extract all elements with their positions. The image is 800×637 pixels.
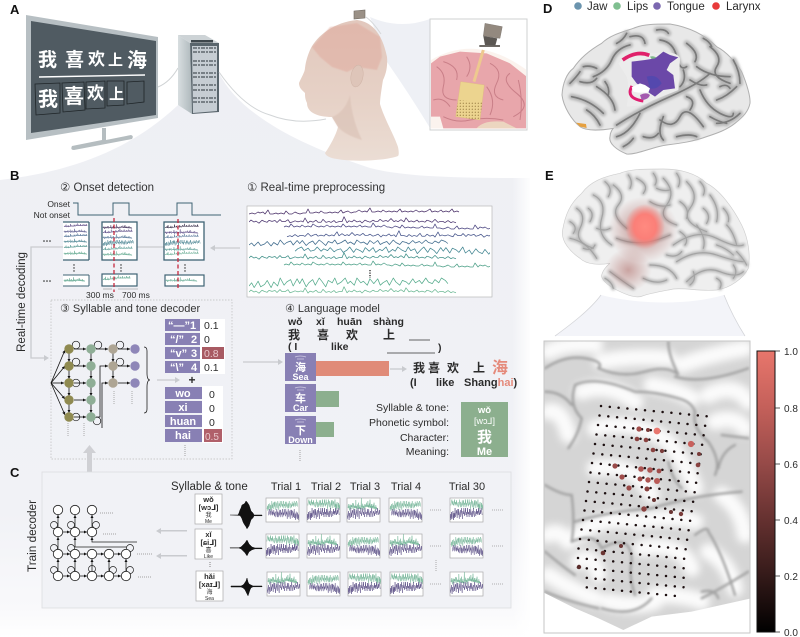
label C: C <box>10 465 20 480</box>
syllable probability table: 0.5 <box>205 432 219 443</box>
waveform: hai <box>231 578 262 596</box>
decoded characters <box>38 79 124 112</box>
card: hai <box>196 571 223 602</box>
syllable probability table <box>165 386 223 457</box>
trial headers: Trial 4 <box>391 481 421 493</box>
waveform: wo <box>230 501 262 529</box>
vertical label: train decoder: Train decoder <box>27 500 39 572</box>
target sentence: 喜 <box>65 45 84 72</box>
syllable probability table: 0 <box>209 417 215 429</box>
vertical label: real-time decoding: Real-time decoding <box>16 252 28 352</box>
arrow to tables <box>157 377 180 383</box>
label E: E <box>545 168 554 183</box>
legend card: Me <box>477 446 492 458</box>
context sentence: ( I <box>288 341 297 353</box>
arrow into decoder <box>44 355 49 361</box>
candidate: car <box>285 384 339 413</box>
array tail <box>474 50 483 82</box>
tick labels: 0.2 <box>784 572 798 583</box>
onset signal: Onset <box>47 199 71 209</box>
plus sign: + <box>188 373 196 387</box>
candidate: sea <box>285 353 389 382</box>
arrow train to decoder <box>83 445 96 482</box>
tone probability table: 0 <box>204 334 210 346</box>
decoded characters: 欢 <box>87 79 104 104</box>
panel: train decoder <box>27 472 511 608</box>
trial headers <box>271 481 485 493</box>
legend card: wǒ <box>477 405 491 416</box>
ear <box>349 64 365 88</box>
candidate: sea: 海 <box>295 359 306 375</box>
panel: language model <box>285 303 518 462</box>
onset signal <box>34 199 221 220</box>
window 2 <box>102 222 137 260</box>
training network <box>50 505 152 581</box>
window 1 <box>63 222 89 260</box>
preprocessed neural traces <box>247 206 494 297</box>
trial headers: Trial 1 <box>271 481 301 493</box>
panel: syllable and tone decoder <box>51 300 232 459</box>
context sentence: ) <box>438 342 442 354</box>
decoded characters: 上 <box>109 83 124 104</box>
window timing <box>86 289 150 300</box>
grey flow line to decoder <box>31 247 165 358</box>
sulci <box>570 173 747 288</box>
funnel edges <box>555 295 745 336</box>
gyral shading <box>570 30 740 147</box>
output brace <box>144 347 150 413</box>
tone probability table: 0.8 <box>204 348 219 360</box>
colorbar <box>757 347 798 637</box>
context sentence: 我 <box>288 326 300 343</box>
output sentence: (I <box>410 377 417 389</box>
candidate: sea: Sea <box>292 372 310 382</box>
target sentence: 欢 <box>88 45 105 70</box>
tick marks <box>775 351 780 632</box>
label A: A <box>10 2 20 17</box>
brain activation map <box>562 169 749 297</box>
legend card: 我 <box>477 426 492 447</box>
electrode pedestal <box>354 10 365 19</box>
output sentence <box>410 354 518 389</box>
sliding onset windows <box>43 218 204 300</box>
syllable probability table: xi <box>178 402 188 414</box>
card ellipsis <box>209 562 211 568</box>
activation core <box>625 204 665 249</box>
tone probability table: “v” <box>170 348 187 360</box>
card: hai: hǎi <box>204 572 215 581</box>
window timing: 700 ms <box>122 290 150 300</box>
electrode grid <box>577 405 717 599</box>
legend card <box>461 402 508 458</box>
candidate: down <box>285 416 334 445</box>
orange spot <box>576 123 587 128</box>
brain seen through skull <box>312 23 382 72</box>
tone probability table: 0.1 <box>204 320 219 332</box>
waveform: xi <box>230 540 262 556</box>
tick labels: 0.6 <box>784 460 798 471</box>
card: wo: 我 <box>205 510 212 519</box>
legend: articulators: Tongue <box>667 1 705 13</box>
candidate ellipsis <box>299 450 301 462</box>
tone probability table: 2 <box>191 334 197 346</box>
window 3 <box>164 222 204 260</box>
panel: electrode map on cortex <box>542 341 752 637</box>
legend labels: Character: <box>400 432 449 444</box>
card: wo: wǒ <box>202 495 214 504</box>
output sentence: Shanghai) <box>464 377 518 389</box>
card: xi <box>195 529 222 560</box>
context sentence: huān <box>337 316 362 328</box>
electrode array pad <box>456 82 484 120</box>
larynx regions <box>623 53 649 60</box>
card: xi: 喜 <box>205 545 212 554</box>
high-weight electrodes <box>577 426 701 569</box>
heading: onset detection: ② Onset detection <box>60 182 154 194</box>
target sentence: 海 <box>127 44 147 73</box>
ellipsis marks <box>43 240 186 282</box>
wire monitor to server <box>158 68 178 87</box>
tone probability table: 0.1 <box>204 362 219 374</box>
vertical ellipsis <box>369 270 371 278</box>
syllable probability table: huan <box>170 416 196 428</box>
monitor stand <box>71 128 133 150</box>
window timing: 300 ms <box>86 290 114 300</box>
context sentence: 喜 <box>317 326 329 343</box>
recurrent network <box>51 341 140 436</box>
arrows cards to network <box>156 528 187 559</box>
card: wo: Me <box>205 519 212 525</box>
jaw and neck shading <box>332 95 362 140</box>
inset: electrode array on brain <box>430 19 527 130</box>
arrow preprocessing to onset <box>210 245 240 251</box>
monitor showing decoded sentence <box>26 15 158 150</box>
legend labels: Meaning: <box>406 446 449 458</box>
tone probability table: 3 <box>191 348 197 360</box>
legend labels <box>369 402 449 458</box>
candidate: car: 车 <box>295 390 306 406</box>
output sentence: 欢 <box>447 359 459 376</box>
candidate: down: 下 <box>295 422 306 438</box>
wire server to head <box>219 72 326 121</box>
tick labels <box>784 347 798 637</box>
tone probability table: “—”1 <box>168 320 196 332</box>
heading: decoder: ③ Syllable and tone decoder <box>60 303 200 315</box>
trial headers: Trial 3 <box>350 481 380 493</box>
small lower windows <box>63 274 204 286</box>
motor cortex pale patch <box>618 52 680 107</box>
trial headers: Trial 2 <box>311 481 341 493</box>
legend: articulators: Lips <box>627 1 648 13</box>
tongue region <box>632 52 678 97</box>
red onset markers <box>114 218 178 292</box>
card: xi: Like <box>204 554 213 560</box>
legend: articulators <box>574 1 761 13</box>
card: xi: [ɕi⅃] <box>200 538 217 547</box>
card: wo <box>195 494 222 525</box>
heading: real-time preprocessing: ① Real-time preprocessing <box>247 182 385 194</box>
tick labels: 0.8 <box>784 404 798 415</box>
legend labels: Syllable & tone: <box>376 402 449 414</box>
context sentence: 欢 <box>346 326 358 343</box>
gyral shading <box>570 173 747 288</box>
context sentence: wǒ <box>287 316 303 328</box>
funnel to electrode map <box>555 295 745 336</box>
onset signal: Not onset <box>34 210 71 220</box>
heading: language model: ④ Language model <box>285 303 380 315</box>
legend: articulators: Larynx <box>726 1 761 13</box>
syllable probability table: 0 <box>209 403 215 415</box>
label D: D <box>543 1 552 16</box>
head illustration <box>299 10 399 161</box>
decoded characters: 喜 <box>64 80 84 109</box>
trial headers: Trial 30 <box>449 481 485 493</box>
arrow to output <box>390 366 407 372</box>
context sentence: 上 <box>383 326 395 343</box>
brain tissue <box>431 52 527 128</box>
legend: articulators: Jaw <box>587 1 608 13</box>
syllable probability table: wo <box>174 388 191 400</box>
target sentence: 我 <box>38 45 57 72</box>
card: hai: Sea <box>205 596 214 602</box>
card: hai: [xaɪ⅃] <box>199 580 221 589</box>
card: hai: 海 <box>206 587 213 596</box>
legend labels: Phonetic symbol: <box>369 417 449 429</box>
context sentence: shàng <box>373 316 404 328</box>
tone probability table: “\” <box>170 362 184 374</box>
panel B background swoosh <box>0 73 530 637</box>
card: wo: [wɔ⅃] <box>199 503 219 512</box>
sulci <box>570 30 740 147</box>
output sentence: like <box>436 377 454 389</box>
label B: B <box>10 168 19 183</box>
cortical folds <box>545 342 748 612</box>
syllable probability table: hai <box>175 430 191 442</box>
target sentence <box>38 44 147 73</box>
decoded character boxes <box>35 81 144 115</box>
server rack <box>178 35 219 114</box>
tick labels: 0.4 <box>784 516 798 527</box>
jaw highlight <box>632 83 650 93</box>
arrow decoder to language model <box>243 359 283 365</box>
tone probability table: 4 <box>191 362 198 374</box>
candidate: car: Car <box>293 403 308 413</box>
brain map: articulator regions <box>562 24 750 154</box>
output sentence: 我 <box>413 359 425 376</box>
syllable probability table: 0 <box>209 389 215 401</box>
card: xi: xǐ <box>205 530 213 539</box>
output sentence: 喜 <box>428 359 440 376</box>
tone probability table: “/” <box>170 334 184 346</box>
candidate: down: Down <box>288 435 313 445</box>
decoded characters: 我 <box>38 83 58 112</box>
pedestal <box>479 45 500 47</box>
tone probability table <box>165 319 225 374</box>
context sentence: like <box>331 341 349 353</box>
lower activation <box>605 248 652 292</box>
trial trace grid <box>265 494 503 596</box>
lips region <box>650 56 658 62</box>
white background below brain <box>544 593 750 632</box>
heading: syllable & tone: Syllable & tone <box>171 481 248 493</box>
context sentence <box>287 316 442 354</box>
legend card: [wɔ⅃] <box>474 416 495 426</box>
tick labels: 1.0 <box>784 347 798 358</box>
output sentence: 海 <box>492 354 508 378</box>
target sentence: 上 <box>108 49 123 70</box>
activation halo <box>608 197 678 263</box>
output sentence: 上 <box>473 359 485 376</box>
funnel from head to inset <box>370 17 430 128</box>
context sentence: xǐ <box>316 316 326 328</box>
